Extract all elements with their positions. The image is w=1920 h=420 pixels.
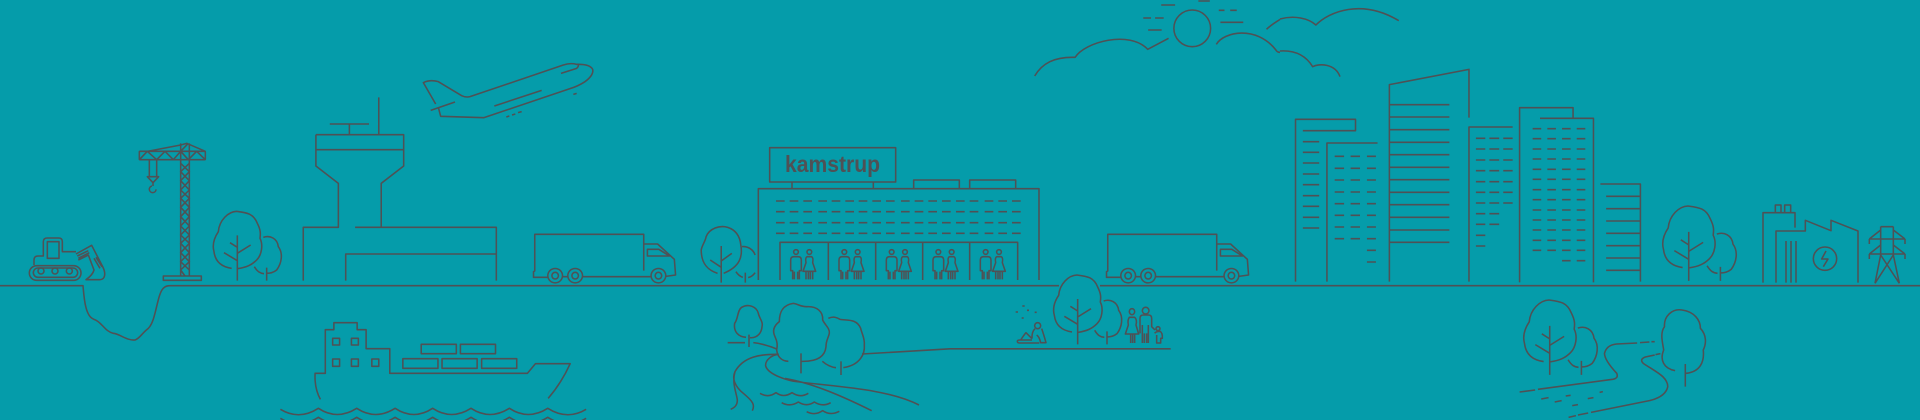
icon: truck left <box>534 234 676 283</box>
Kamstrup headquarters building <box>758 148 1039 280</box>
window dashes <box>776 201 1021 233</box>
icon: tree pair in park <box>1054 275 1122 344</box>
icon: electricity pylon <box>1869 227 1905 283</box>
winding road with tree <box>1520 310 1705 417</box>
sign board <box>770 148 896 182</box>
building 5 <box>1520 108 1593 282</box>
building 1 <box>1296 119 1356 282</box>
building 2 <box>1327 143 1378 282</box>
icon: cargo ship <box>315 323 570 399</box>
icon: family <box>1125 307 1162 343</box>
sea waves <box>280 408 586 420</box>
park path <box>862 349 1171 354</box>
city skyline <box>1296 69 1640 282</box>
icon: tree pair by city <box>1663 206 1736 281</box>
ground line with excavation pit <box>0 286 1920 340</box>
logo text: kamstrup: kamstrup <box>785 151 880 177</box>
building 3 <box>1389 69 1469 282</box>
building 4 <box>1469 127 1513 282</box>
icon: tower crane <box>139 143 205 280</box>
clouds <box>1035 9 1399 77</box>
river and park trees <box>728 303 919 414</box>
icon: tree pair by road <box>1524 300 1597 375</box>
people in ground floor windows <box>791 250 1005 279</box>
icon: tree pair by crane <box>213 211 281 281</box>
icon: airplane taking off <box>423 64 593 118</box>
icon: truck right <box>1107 234 1249 283</box>
icon: excavator <box>29 238 105 280</box>
building 6 <box>1600 184 1640 282</box>
icon: power plant <box>1763 205 1858 283</box>
icon: person sitting on the grass <box>1016 306 1046 343</box>
icon: tree by headquarters <box>701 227 755 283</box>
airport terminal and control tower <box>303 97 496 281</box>
sun <box>1143 1 1243 47</box>
